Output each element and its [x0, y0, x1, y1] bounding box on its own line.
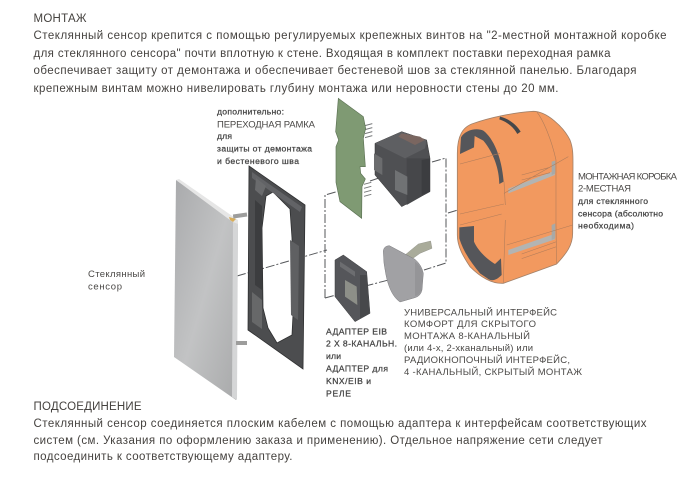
paragraph: connection description: [34, 418, 647, 463]
heading: mounting: МОНТАЖ: [34, 13, 87, 25]
label: bus adapter: или: [326, 351, 341, 361]
icon: orange mounting box: [457, 111, 573, 283]
box top strap: [499, 117, 521, 134]
paragraph: connection description: систем (см. Указания по оформлению заказа и применению). Отдельное напряжение сети следует: [34, 435, 603, 447]
label: universal interface: (или 4-х, 2-хканальный) или: [404, 343, 533, 354]
icon: relay module: [374, 132, 430, 207]
heading: connection: ПОДСОЕДИНЕНИЕ: [34, 401, 142, 413]
label: adapter frame: ПЕРЕХОДНАЯ РАМКА: [217, 120, 316, 130]
label: universal interface: КОМФОРТ ДЛЯ СКРЫТОГО: [404, 319, 536, 330]
label: bus adapter: KNX/EIB и: [326, 376, 371, 386]
label: bus adapter: [326, 326, 397, 398]
paragraph: mounting description: обеспечивает защиту от демонтажа и обеспечивает бестеневой шов за стеклянной панелью. Благодаря: [34, 65, 636, 77]
section: mounting text: [34, 13, 666, 95]
box gray slots: [508, 171, 555, 255]
exploded diagram: [174, 98, 573, 400]
label: mounting box: МОНТАЖНАЯ КОРОБКА: [578, 172, 678, 182]
label: bus adapter: 2 X 8-КАНАЛЬН.: [326, 338, 397, 348]
paragraph: mounting description: [34, 30, 666, 95]
label: adapter frame: для: [217, 131, 232, 141]
label: adapter frame: и бестеневого шва: [217, 156, 299, 166]
box outlines: [460, 112, 573, 283]
label: glass sensor: сенсор: [88, 282, 122, 292]
label: universal interface: МОНТАЖА 8-КАНАЛЬНЫЙ: [404, 330, 530, 342]
paragraph: mounting description: крепежным винтам можно нивелировать глубину монтажа или неровности стены до 20 мм.: [34, 83, 558, 95]
label: adapter frame: [217, 106, 316, 166]
label: mounting box: для стеклянного: [578, 196, 648, 206]
label: mounting box: сенсора (абсолютно: [578, 208, 663, 218]
label: universal interface: УНИВЕРСАЛЬНЫЙ ИНТЕРФЕЙС: [404, 306, 557, 318]
box bottom dark cavity: [459, 226, 502, 280]
label: mounting box: [578, 172, 678, 230]
icon: glass sensor panel: [174, 179, 247, 400]
label: mounting box: 2-МЕСТНАЯ: [578, 184, 631, 194]
label: mounting box: необходима): [578, 220, 634, 230]
label: bus adapter: АДАПТЕР EIB: [326, 326, 387, 336]
dashed assembly lines: [237, 158, 458, 298]
label: adapter frame: защиты от демонтажа: [217, 144, 312, 154]
paragraph: mounting description: для стеклянного сенсора" почти вплотную к стене. Входящая в комплект поставки переходная рамка: [34, 48, 611, 60]
paragraph: connection description: Стеклянный сенсор соединяется плоским кабелем с помощью адаптера к интерфейсам соответствующих: [34, 418, 647, 430]
icon: bus adapter: [335, 255, 370, 322]
label: adapter frame: дополнительно:: [217, 106, 284, 116]
paragraph: connection description: подсоединить к соответствующему адаптеру.: [34, 451, 292, 463]
paragraph: mounting description: Стеклянный сенсор крепится с помощью регулируемых крепежных винтов на "2-местной монтажной коробке: [34, 30, 666, 42]
label: bus adapter: РЕЛЕ: [326, 388, 351, 398]
label: glass sensor: Стеклянный: [88, 269, 145, 280]
label: universal interface: 4 -КАНАЛЬНЫЙ, СКРЫТЫЙ МОНТАЖ: [404, 366, 582, 378]
icon: green circuit board: [336, 98, 372, 218]
label: universal interface: [404, 306, 582, 378]
label: bus adapter: АДАПТЕР для: [326, 364, 388, 374]
section: connection text: [34, 401, 647, 463]
icon: flat cable interface: [383, 241, 432, 302]
icon: adapter frame: [248, 166, 305, 369]
label: glass sensor: [88, 269, 145, 292]
label: universal interface: РАДИОКНОПОЧНЫЙ ИНТЕРФЕЙС,: [404, 354, 570, 366]
box top dark cavity: [460, 129, 504, 184]
